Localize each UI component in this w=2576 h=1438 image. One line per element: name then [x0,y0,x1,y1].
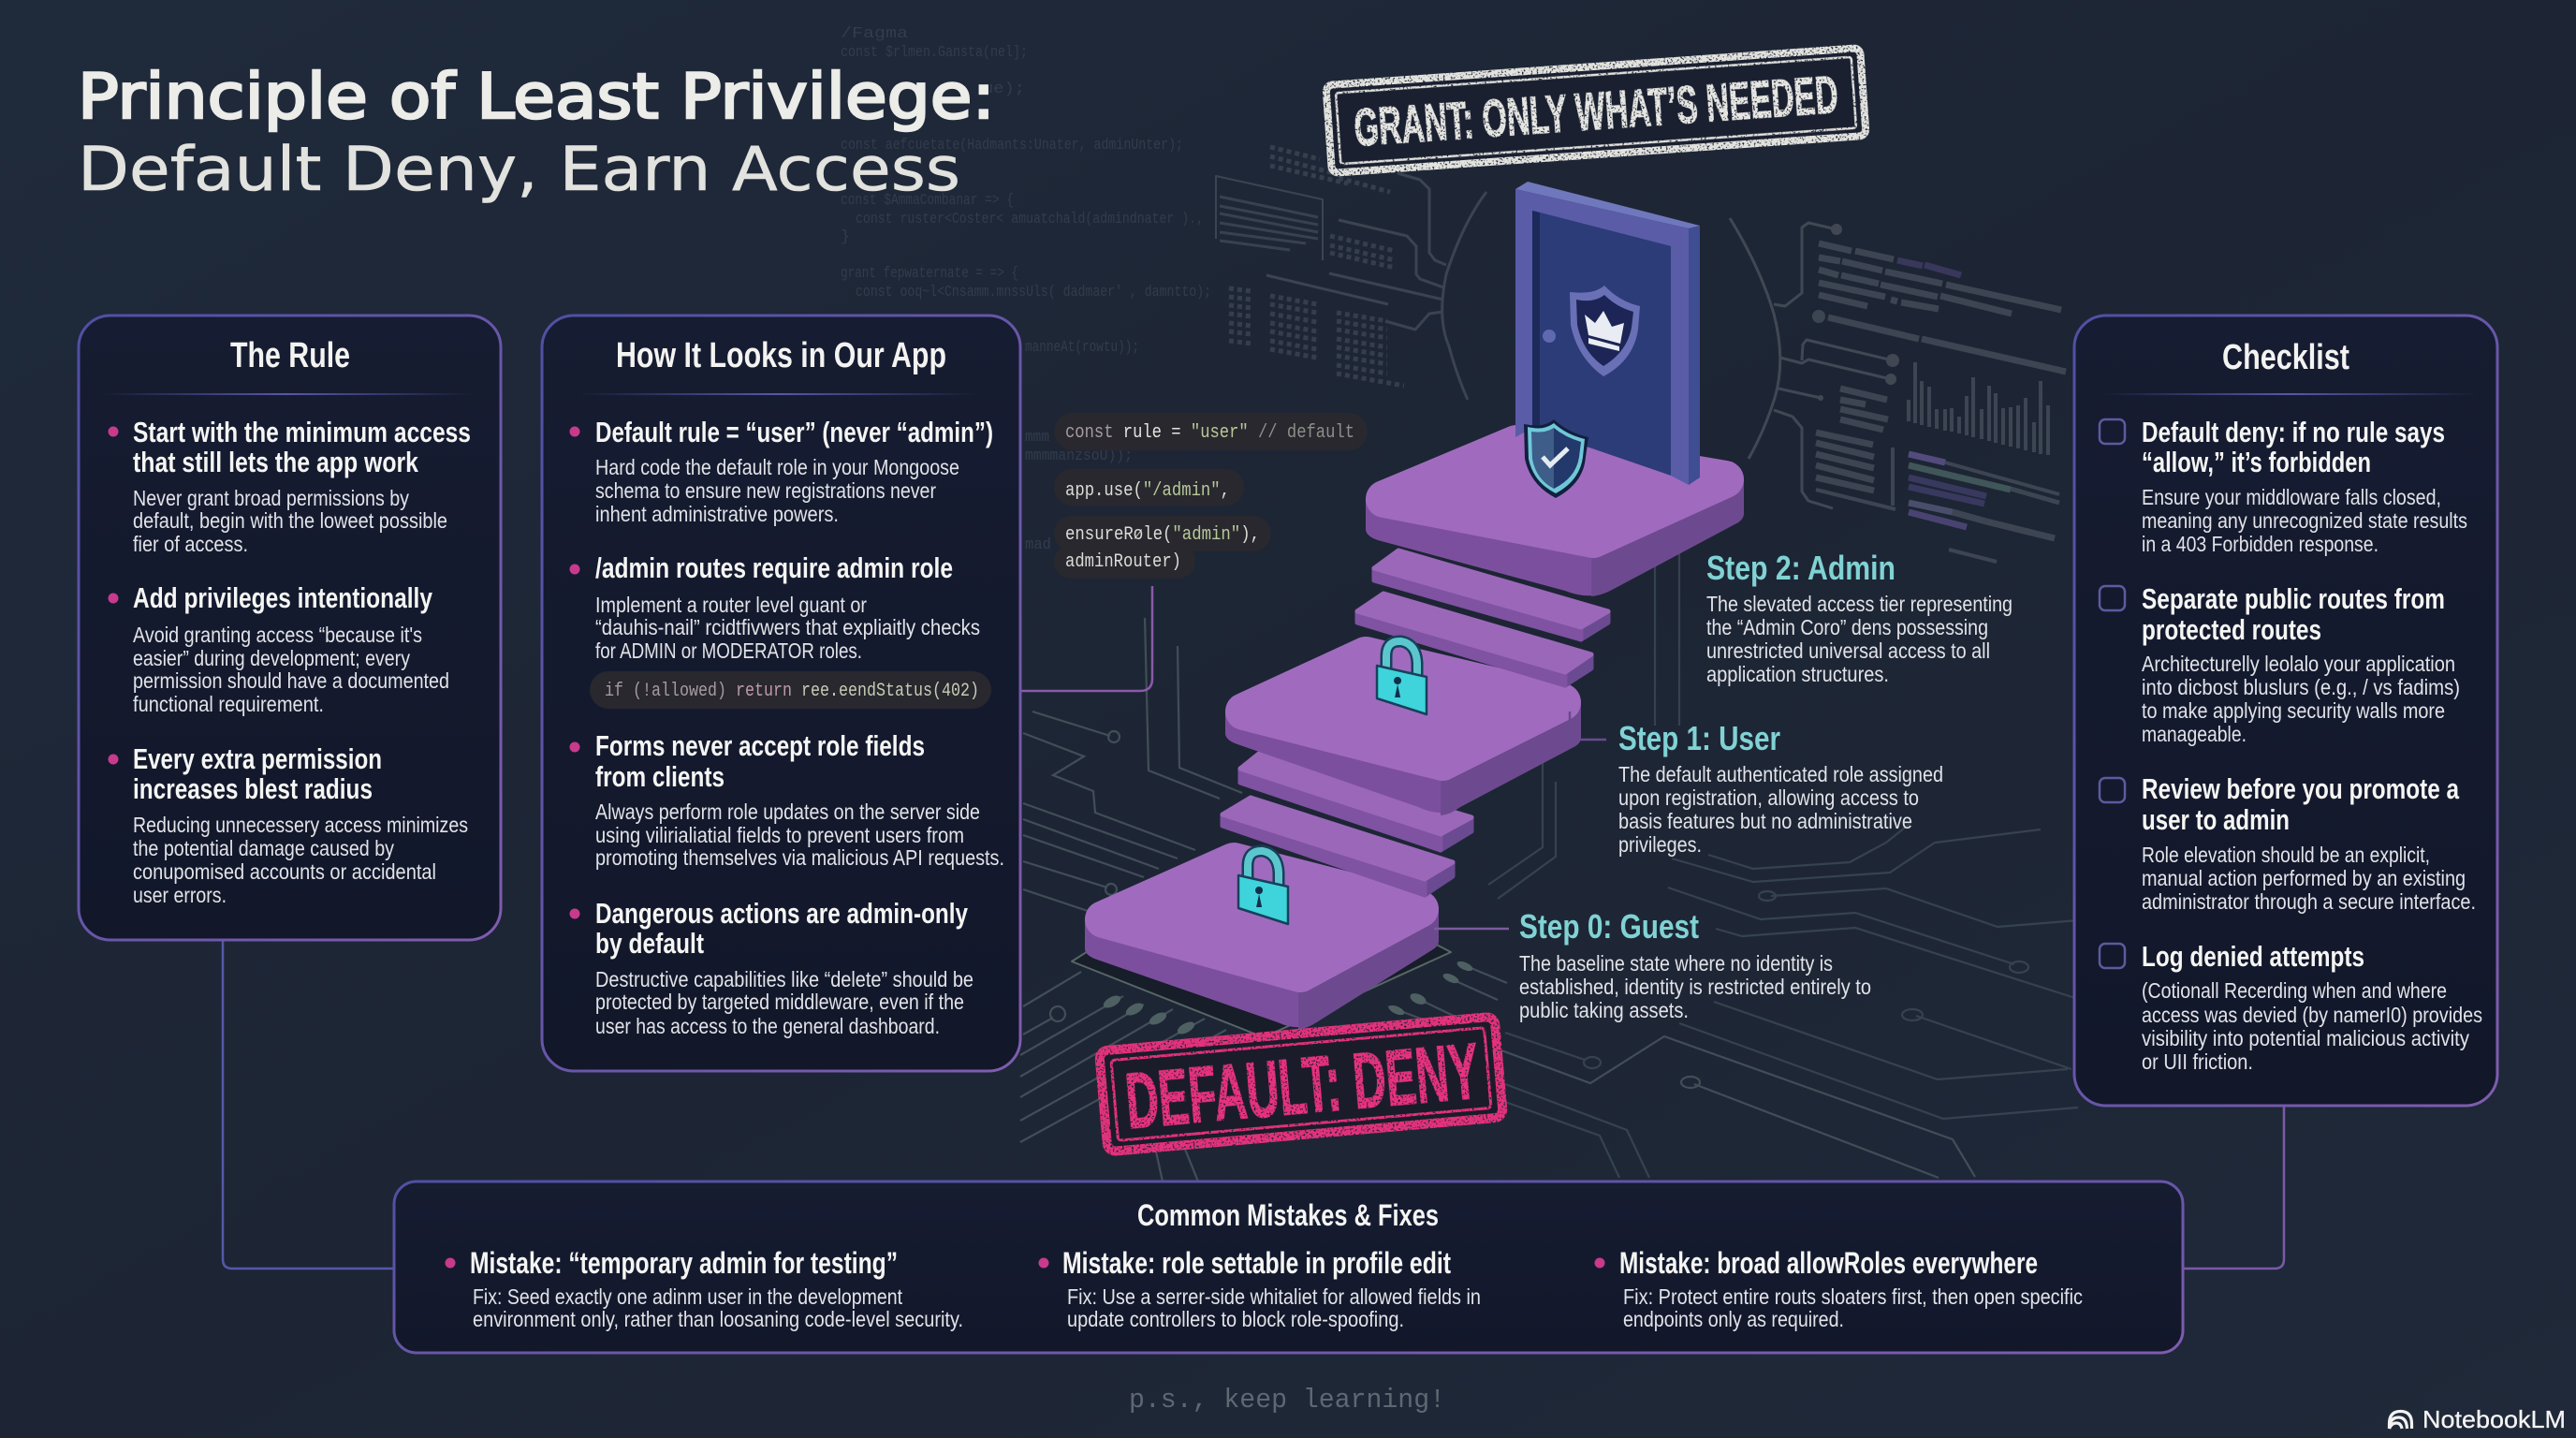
connector: step 0 [1434,928,1509,930]
mistake: role settable: Fix: Use a serrer-side whitaliet for allowed fields in [1067,1284,1481,1309]
item: privileges: permission should have a documented [133,668,449,693]
background code snippet: mmm [1025,429,1049,447]
item: separate routes [2100,583,2460,746]
item: default rule: inhent administrative powers. [595,502,839,526]
icon: check shield [1524,419,1588,498]
label: step 2 admin [1706,549,2012,686]
background code snippet: mmmmanzsoU)); [1025,448,1133,465]
staircase: guest platform [1085,861,1439,1030]
connector: code chips to code pill [990,586,1152,691]
staircase: lower step slabs [1222,754,1471,895]
item: admin routes [569,552,980,663]
connector: step 1 [1570,712,1606,740]
item: default deny: Ensure your middloware falls closed, [2142,485,2441,509]
item: forms: Always perform role updates on the server side [595,800,980,824]
title [78,60,995,205]
item: forms: from clients [595,761,724,793]
icon: user lock [1377,641,1427,714]
item: default deny: Default deny: if no rule says [2142,417,2445,448]
background code snippet: const $AmmaCombanar => { [841,192,1014,210]
icon: admin door [1515,182,1700,485]
item: admin routes: /admin routes require admin role [595,552,953,584]
panel: common mistakes and fixes [394,1181,2183,1353]
label: step 0 guest: public taking assets. [1519,998,1689,1022]
item: default rule: Hard code the default role in your Mongoose [595,455,959,479]
item: separate routes: protected routes [2142,614,2321,646]
item: default rule [569,417,993,526]
item: blast radius: Every extra permission [133,743,382,775]
item: separate routes: into dicbost bluslurs (e.g., / vs fadims) [2142,675,2460,699]
item: forms: promoting themselves via malicious API requests. [595,845,1004,870]
chip: ensure role [1054,516,1271,579]
item: default deny: meaning any unrecognized state results [2142,508,2467,533]
footer note: p.s., keep learning! [1129,1385,1445,1416]
item: dangerous actions: user has access to the general dashboard. [595,1014,940,1038]
icon: notebooklm arcs [2389,1412,2411,1429]
item: log attempts: visibility into potential malicious activity [2142,1026,2469,1050]
item: minimum access: Never grant broad permissions by [133,486,409,510]
chip: const rule [1054,413,1368,450]
background code snippet [841,25,1211,554]
item: log attempts: access was devied (by namerI0) provides [2142,1003,2482,1027]
label: step 0 guest: Step 0: Guest [1519,907,1699,946]
icon: crown shield [1570,286,1640,376]
mistake: temporary admin: Mistake: “temporary admin for testing” [470,1246,898,1280]
stamp: grant only what's needed [1325,48,1866,173]
connector: left panel to mistakes [223,940,394,1269]
item: admin routes: Implement a router level guant or [595,593,867,617]
chip: ensure role: adminRouter) [1065,551,1181,573]
item: dangerous actions: Dangerous actions are admin-only [595,898,968,930]
mistake: temporary admin [446,1246,963,1331]
label: step 1 user [1618,719,1943,857]
chip: app use [1054,469,1244,506]
background hud: left data panels [1216,147,1486,400]
background code snippet: } [841,228,850,246]
panel: how it looks in our app [542,315,1020,1071]
label: step 0 guest: established, identity is restricted entirely to [1519,975,1871,999]
item: review: administrator through a secure interface. [2142,889,2476,914]
staircase: upper step slabs [1357,550,1608,685]
mistake: broad allowRoles: Fix: Protect entire routs sloaters first, then open specific [1623,1284,2083,1309]
heading: checklist: Checklist [2222,338,2349,377]
heading: how it looks: How It Looks in Our App [616,336,946,375]
item: privileges [109,582,449,716]
heading: the rule: The Rule [230,336,350,375]
mistake: broad allowRoles: Mistake: broad allowRoles everywhere [1619,1246,2038,1280]
heading: common mistakes: Common Mistakes & Fixes [1137,1198,1439,1232]
label: step 1 user: Step 1: User [1618,719,1780,757]
mistake: role settable: update controllers to block role-spoofing. [1067,1307,1404,1331]
stamp: default deny: DEFAULT: DENY [1122,1027,1483,1145]
item: minimum access: fier of access. [133,532,248,556]
item: review: Role elevation should be an explicit, [2142,843,2430,867]
item: blast radius: user errors. [133,883,227,907]
code chips [1054,413,1368,579]
staircase: user platform [1225,655,1581,815]
title: Default Deny, Earn Access [78,135,960,205]
item: review [2100,773,2476,914]
item: separate routes: Architecturelly leolalo your application [2142,652,2455,676]
background hud: right dashboard [1730,218,2066,562]
mistake: role settable: Mistake: role settable in profile edit [1062,1246,1451,1280]
item: review: Review before you promote a [2142,773,2460,805]
item: privileges: easier” during development; every [133,646,410,670]
mistake: role settable [1039,1246,1481,1331]
item: minimum access: that still lets the app work [133,447,418,478]
stamp: grant only what's needed: GRANT: ONLY WHAT’S NEEDED [1352,65,1840,158]
chip: ensure role: ensureRøle("admin"), [1065,524,1260,546]
chip: app use: app.use("/admin", [1065,480,1230,502]
label: step 2 admin: the “Admin Coro” dens possessing [1706,615,1988,639]
code pill: if allowed: if (!allowed) return ree.eendStatus(402) [605,681,979,702]
item: blast radius: increases blest radius [133,773,373,805]
mistake: broad allowRoles [1595,1246,2083,1331]
item: log attempts [2100,941,2482,1074]
label: step 0 guest [1519,907,1871,1022]
item: forms [569,730,1004,870]
staircase: admin platform [1366,444,1744,596]
label: step 2 admin: unrestricted universal access to all [1706,638,1990,663]
background code snippet: /Fagma [841,25,908,43]
item: default rule: Default rule = “user” (never “admin”) [595,417,993,448]
label: step 1 user: The default authenticated role assigned [1618,762,1943,786]
item: default rule: schema to ensure new registrations never [595,478,936,503]
background code snippet: mad [1025,536,1051,554]
item: forms: using vilirialiatial fields to prevent users from [595,823,964,847]
item: review: user to admin [2142,804,2290,836]
label: step 2 admin: The slevated access tier representing [1706,592,2012,616]
label: step 1 user: upon registration, allowing access to [1618,785,1919,810]
label: step 0 guest: The baseline state where no identity is [1519,951,1833,976]
item: log attempts: (Cotionall Recerding when and where [2142,978,2447,1003]
mistake: temporary admin: Fix: Seed exactly one adinm user in the development [473,1284,902,1309]
item: minimum access [109,417,471,556]
item: privileges: functional requirement. [133,692,324,716]
item: separate routes: to make applying security walls more [2142,698,2445,723]
item: blast radius: the potential damage caused by [133,836,394,860]
item: dangerous actions [569,898,973,1038]
background code snippet: ue); [983,81,1025,98]
background code snippet: grant fepwaternate = => { [841,265,1018,283]
connector: checklist to mistakes [2183,1106,2284,1269]
item: separate routes: manageable. [2142,722,2247,746]
background code snippet: const ruster<Coster< amuatchald(admindnater )., [856,211,1204,228]
item: blast radius: conupomised accounts or accidental [133,859,436,884]
item: default deny: “allow,” it’s forbidden [2142,447,2371,478]
chip outline under guest platform [1072,899,1451,1037]
icon: door knob [1543,330,1556,343]
panel: checklist [2074,315,2497,1106]
item: forms: Forms never accept role fields [595,730,925,762]
logo: notebooklm: NotebookLM [2422,1405,2566,1433]
item: admin routes: for ADMIN or MODERATOR roles. [595,638,862,663]
label: step 2 admin: Step 2: Admin [1706,549,1895,587]
item: minimum access: default, begin with the loweet possible [133,508,447,533]
label: step 1 user: basis features but no administrative [1618,809,1912,833]
mistake: temporary admin: environment only, rather than loosaning code-level security. [473,1307,963,1331]
code pill: if allowed [590,671,991,709]
item: privileges: Avoid granting access “because it's [133,623,422,647]
background code snippet: const aefcuetate(Hadmants:Unater, adminUnter); [841,137,1183,154]
item: dangerous actions: by default [595,928,704,960]
item: privileges: Add privileges intentionally [133,582,432,614]
item: minimum access: Start with the minimum access [133,417,471,448]
item: dangerous actions: Destructive capabilities like “delete” should be [595,967,973,991]
chip: const rule: const rule = "user" // default [1065,422,1354,444]
item: log attempts: Log denied attempts [2142,941,2364,973]
item: log attempts: or UII friction. [2142,1049,2253,1074]
item: separate routes: Separate public routes from [2142,583,2445,615]
item: blast radius [109,743,468,907]
panel: the rule [79,315,501,940]
stamp: default deny [1099,1017,1503,1152]
background code snippet: const ooq~l<Cnsamm.mnssUls( dadmaer' , damntto); [856,284,1211,301]
icon: guest lock [1238,851,1288,924]
item: default deny [2100,417,2467,556]
label: step 2 admin: application structures. [1706,662,1889,686]
item: default deny: in a 403 Forbidden response. [2142,532,2378,556]
mistake: broad allowRoles: endpoints only as required. [1623,1307,1844,1331]
title: Principle of Least Privilege: [78,60,995,133]
item: dangerous actions: protected by targeted middleware, even if the [595,990,964,1014]
item: admin routes: “dauhis-nail” rcidtfivwers that expliaitly checks [595,615,980,639]
item: review: manual action performed by an existing [2142,866,2466,890]
background code snippet: const $rlmen.Gansta(nel]; [841,44,1028,62]
item: blast radius: Reducing unnecessery access minimizes [133,813,468,837]
label: step 1 user: privileges. [1618,832,1702,857]
background code snippet: manneAt(rowtu)); [1025,339,1139,357]
circuit traces [1020,552,2078,1181]
